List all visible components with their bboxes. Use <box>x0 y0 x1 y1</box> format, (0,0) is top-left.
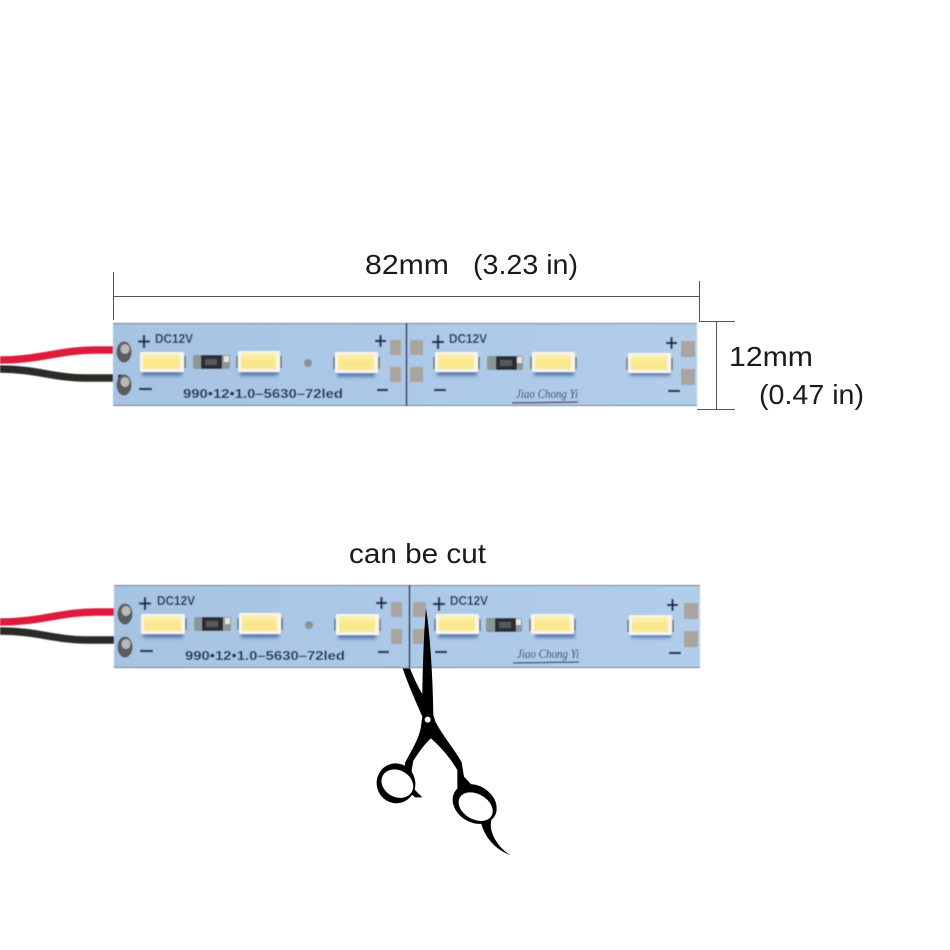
LED row shadows <box>142 370 670 377</box>
board printing <box>138 331 680 401</box>
finger rest tail <box>480 817 510 855</box>
circuit board <box>113 323 697 406</box>
LED chips <box>140 351 672 373</box>
cut line <box>406 323 408 406</box>
dimension lines: length <box>113 272 700 321</box>
mounting dot <box>304 359 312 367</box>
solder joints <box>116 342 132 396</box>
LED strip 2 with wires <box>0 585 700 668</box>
board printing: DC12V <box>449 331 487 346</box>
label: length 82mm: 82mm <box>365 249 449 280</box>
circuit board <box>114 585 700 668</box>
black wire <box>0 369 120 378</box>
label: length in inches: (3.23 in) <box>473 249 578 280</box>
black wire <box>0 631 121 640</box>
LED chips <box>141 613 673 635</box>
board printing <box>139 593 681 663</box>
signature: Jiao Chong Yi <box>516 386 578 401</box>
resistors <box>194 617 522 632</box>
cut line <box>408 585 410 668</box>
scissor blades and arms <box>403 608 475 800</box>
red wire <box>0 350 120 360</box>
dimension lines: width <box>697 321 735 410</box>
LED strip 1 with wires <box>0 323 697 406</box>
label: width 12mm: 12mm <box>729 341 813 372</box>
signature: Jiao Chong Yi <box>517 646 579 661</box>
scissors pivot <box>425 717 431 723</box>
copper cut pads <box>390 340 695 385</box>
right finger ring <box>445 776 504 832</box>
mounting dot <box>305 621 313 629</box>
board printing: 990•12•1.0–5630–72led <box>183 386 343 401</box>
board printing: 990•12•1.0–5630–72led <box>185 648 345 663</box>
label: width in inches: (0.47 in) <box>759 379 864 410</box>
board printing: DC12V <box>155 331 193 346</box>
label: can be cut: can be cut <box>349 538 486 569</box>
board printing: DC12V <box>157 593 195 608</box>
solder joints <box>118 604 132 658</box>
resistors <box>193 355 523 370</box>
icon: scissors <box>372 608 510 855</box>
LED row shadows <box>143 632 671 639</box>
red wire <box>0 612 121 622</box>
board printing: DC12V <box>450 593 488 608</box>
left finger ring <box>372 759 420 808</box>
copper cut pads <box>391 602 698 647</box>
